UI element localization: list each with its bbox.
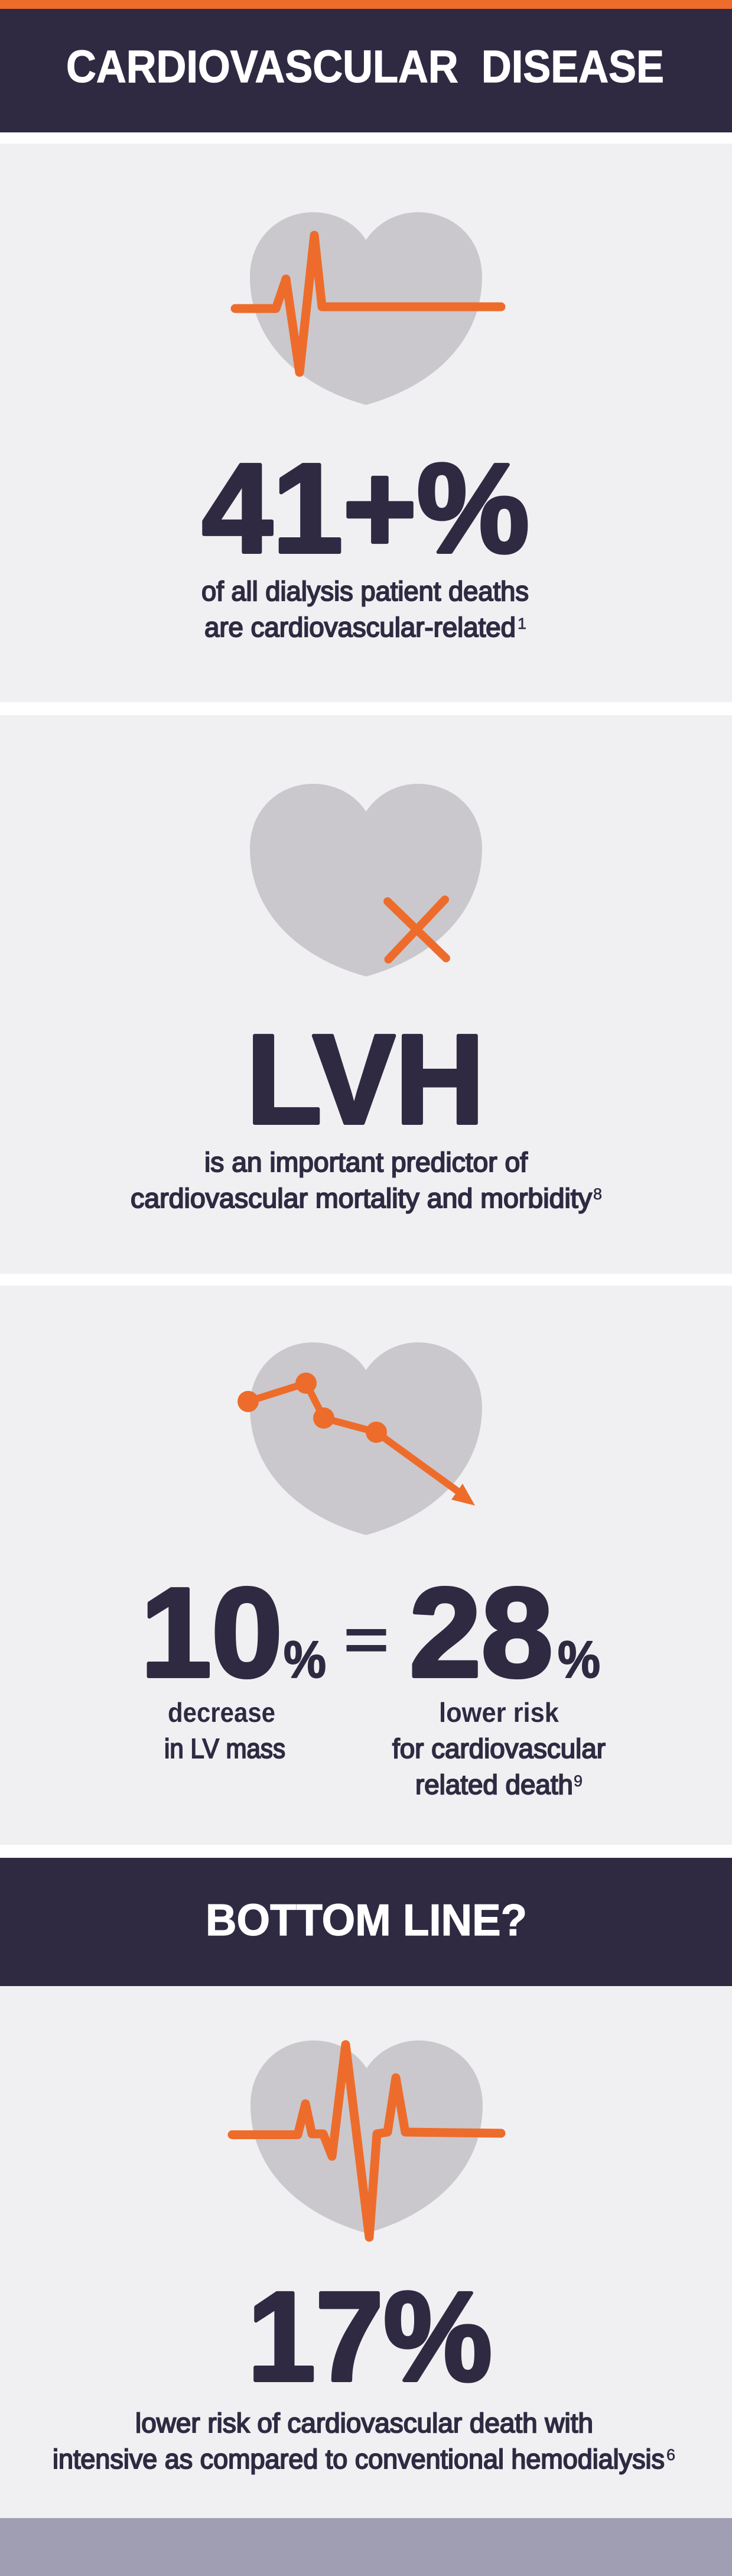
statistic: 28%: 28 [409, 1561, 553, 1704]
statistic: 17%: 17% [248, 2265, 492, 2408]
statistic: 28%: % [558, 1630, 600, 1689]
title banner [0, 0, 732, 132]
icon: heart with ECG line [235, 212, 501, 405]
footer band [0, 2518, 732, 2576]
caption: hemodialysis comparison: lower risk of cardiovascular death with [135, 2408, 593, 2438]
banner: bottom line [0, 1858, 732, 1986]
statistic: LVH: LVH [246, 1008, 484, 1150]
caption: LVH: is an important predictor of [204, 1147, 528, 1177]
caption: LVH: cardiovascular mortality and morbidity [131, 1183, 592, 1214]
icon: heart with falling line chart [238, 1342, 482, 1535]
caption: decrease in LV mass: in LV mass [164, 1733, 285, 1764]
caption: lower risk for cardiovascular related death: 9 [574, 1772, 583, 1790]
statistic: 10%: % [284, 1630, 326, 1689]
panel: 10% equals 28% [0, 1286, 732, 1845]
panel: LVH predictor [0, 715, 732, 1274]
caption: decrease in LV mass [164, 1697, 285, 1764]
panel: 17% lower risk [0, 1986, 732, 2518]
title: CARDIOVASCULAR DISEASE [66, 41, 664, 92]
icon: heart with ECG line [232, 2040, 501, 2237]
caption: hemodialysis comparison [53, 2408, 675, 2474]
caption: decrease in LV mass: decrease [168, 1697, 275, 1728]
panel: 41+% of deaths [0, 144, 732, 702]
caption: lower risk for cardiovascular related death: lower risk [439, 1697, 559, 1728]
caption: lower risk for cardiovascular related death: related death [415, 1769, 573, 1800]
caption: deaths [201, 576, 529, 643]
statistic: 10%: 10 [141, 1561, 282, 1704]
caption: lower risk for cardiovascular related death: for cardiovascular [392, 1733, 606, 1764]
icon: heart with X mark [250, 784, 482, 976]
caption: lower risk for cardiovascular related death [392, 1697, 606, 1800]
caption: LVH: 8 [593, 1185, 602, 1203]
heading: BOTTOM LINE? [206, 1895, 527, 1945]
caption: hemodialysis comparison: 6 [666, 2446, 675, 2464]
caption: deaths: of all dialysis patient deaths [201, 576, 529, 606]
caption: hemodialysis comparison: intensive as compared to conventional hemodialysis [53, 2444, 665, 2474]
equals sign: = [343, 1607, 389, 1673]
statistic: 41+%: 41+% [202, 437, 529, 579]
caption: deaths: are cardiovascular-related [204, 612, 516, 643]
caption: deaths: 1 [518, 615, 526, 632]
caption: LVH [131, 1147, 602, 1214]
